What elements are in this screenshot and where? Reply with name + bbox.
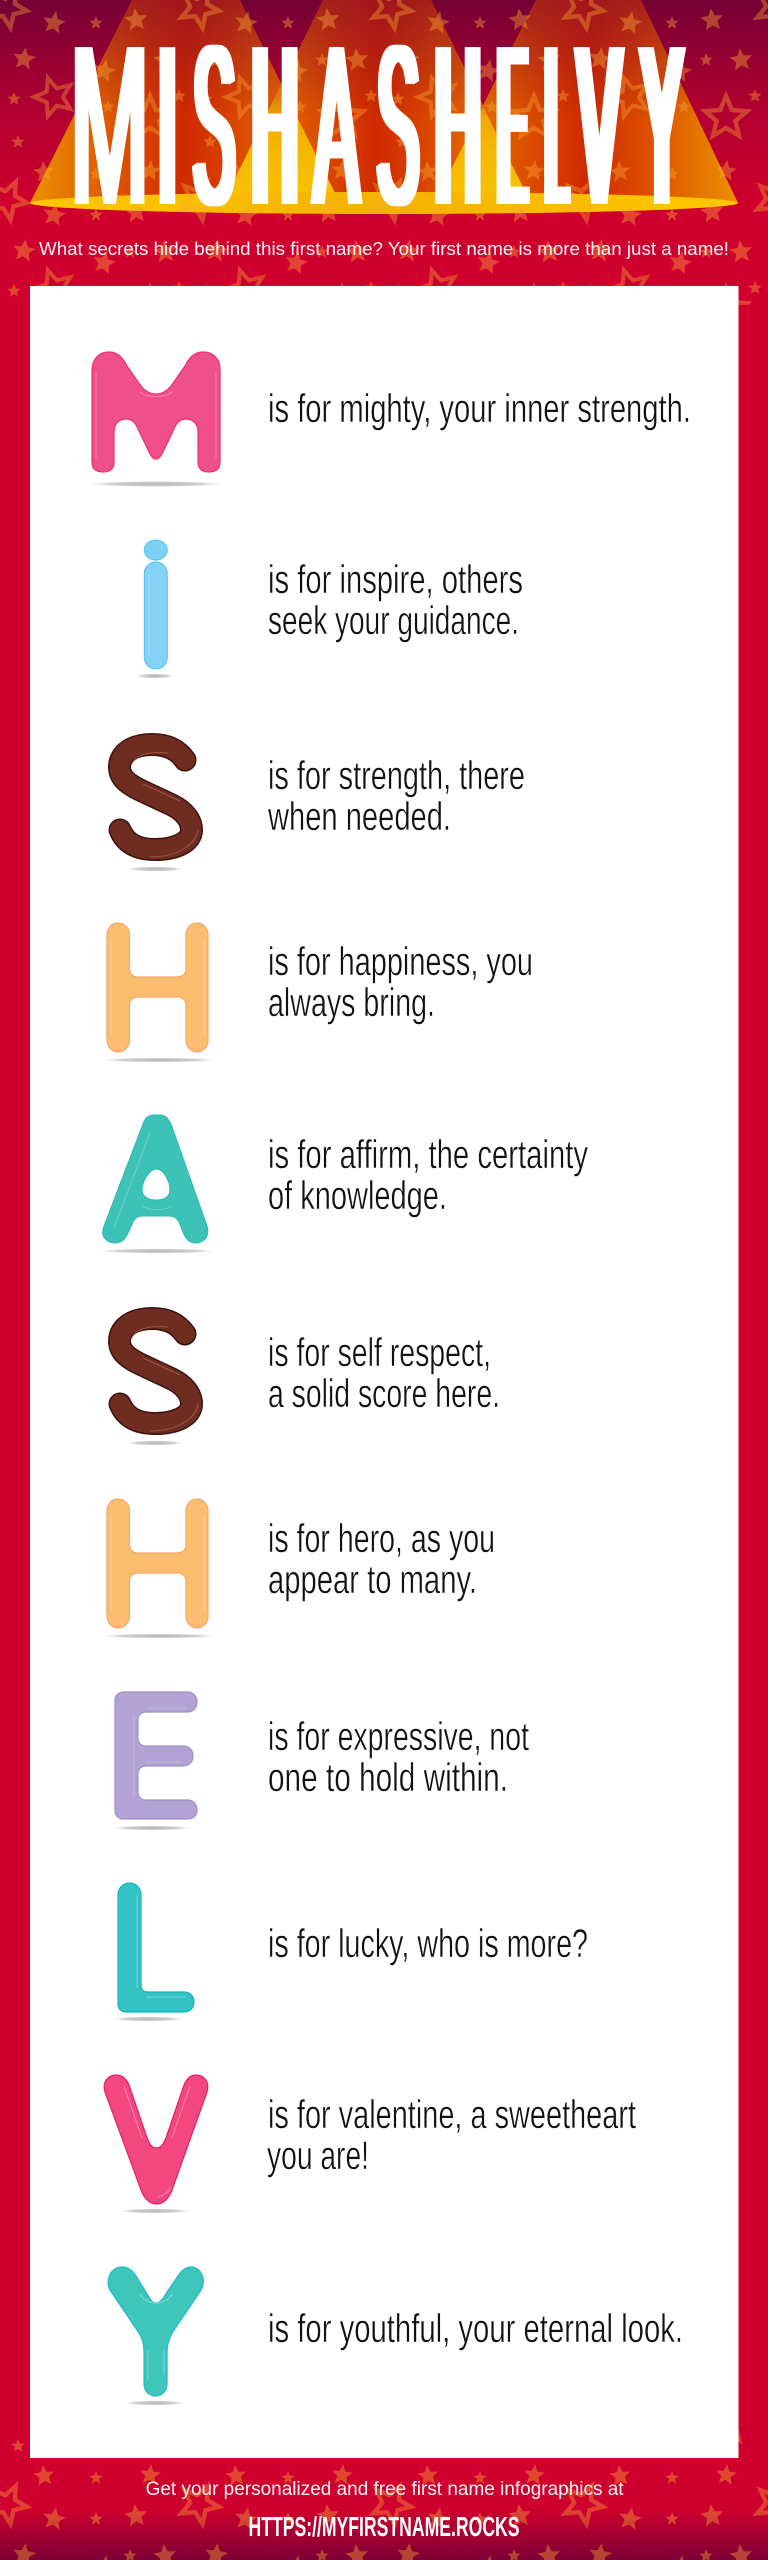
text: A lines: is for affirm, the certainty [268,1133,588,1177]
title: E [498,0,526,253]
icon: chocolate S [120,1318,198,1446]
title: A [314,0,359,253]
row: L [112,1883,588,2022]
row: H [101,923,533,1062]
icon: blue jelly i [136,540,174,678]
row: V [104,2075,636,2214]
text: E lines [268,1715,529,1800]
title: M [70,0,149,253]
icon: pink jelly V [104,2075,208,2214]
icon: teal jelly Y [108,2267,203,2406]
icon: orange jelly H [101,923,217,1062]
row: H second [101,1499,495,1638]
text: A lines: of knowledge. [268,1174,447,1218]
title: H [252,0,298,253]
text: S second lines: a solid score here. [268,1372,500,1416]
row: S second [120,1318,500,1446]
text: E lines: one to hold within. [268,1756,508,1800]
spotlight cones [30,0,738,214]
title: L [546,0,567,253]
icon: teal jelly A [97,1115,217,1254]
panel: white content card [30,286,738,2458]
row: I [136,540,523,678]
icon: pink jelly M [88,352,224,487]
text: S lines [267,754,525,839]
footer url: HTTPS://MYFIRSTNAME.ROCKS [248,2511,520,2542]
title: S [193,0,235,253]
row: E [112,1692,529,1830]
title: Y [641,0,682,253]
text: I lines: seek your guidance. [268,599,519,643]
text: H second lines: is for hero, as you [268,1517,495,1561]
icon: teal jelly L [112,1883,194,2022]
text: L line: is for lucky, who is more? [268,1922,588,1966]
subtitle: What secrets hide behind this first name? Your first name is more than just a name! [39,238,729,259]
text: H second lines [268,1517,495,1602]
title: H [435,0,481,253]
row: Y [108,2267,683,2406]
row: S [120,744,525,872]
text: H lines: is for happiness, you [268,940,533,984]
text: S lines: when needed. [267,795,451,839]
text: E lines: is for expressive, not [268,1715,529,1759]
title: V [578,0,620,253]
title: S [377,0,419,253]
title: I [144,0,191,253]
row: M [88,352,691,487]
title [70,0,686,253]
row: A [97,1115,588,1254]
text: I lines: is for inspire, others [268,558,523,602]
text: S second lines [268,1331,500,1416]
text: H second lines: appear to many. [268,1558,477,1602]
icon: purple jelly E [112,1692,197,1830]
footer line: Get your personalized and free first name infographics at [146,2479,624,2500]
text: V lines: is for valentine, a sweetheart [268,2093,636,2137]
text: A lines [268,1133,588,1218]
text: S second lines: is for self respect, [268,1331,491,1375]
icon: chocolate S [120,744,198,872]
text: H lines [268,940,533,1025]
icon: orange jelly H [101,1499,217,1638]
text: H lines: always bring. [268,981,435,1025]
text: S lines: is for strength, there [268,754,525,798]
text: V lines [267,2093,636,2178]
text: I lines [268,558,523,643]
text: V lines: you are! [267,2134,369,2178]
